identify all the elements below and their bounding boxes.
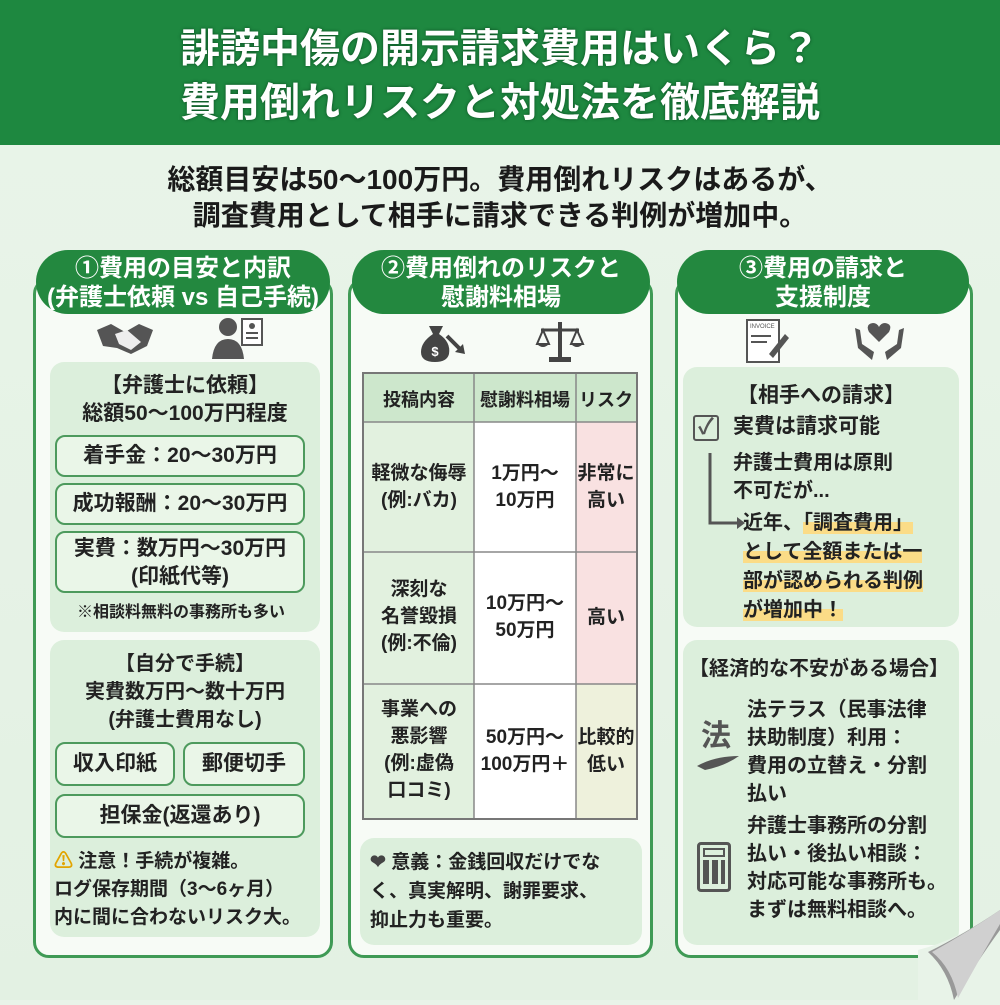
warning text: ⚠ 注意！手続が複雑。 — [54, 851, 249, 872]
table: damages: 高い — [587, 607, 625, 628]
row 3: 事業への — [381, 699, 457, 720]
heading: 【経済的な不安がある場合】 — [689, 658, 949, 680]
text: lawyer total: 【弁護士に依頼】 — [101, 374, 269, 397]
icon: checkbox: ✓ — [698, 414, 714, 439]
icon: money bag — [421, 326, 465, 362]
icon: heart in hands — [855, 323, 904, 360]
row 1 — [371, 462, 466, 511]
text: highlighted precedent: 部が認められる判例 — [743, 570, 923, 592]
row: retainer — [55, 435, 305, 477]
text: houterasu — [747, 698, 927, 805]
box: financial worries — [683, 640, 959, 945]
row: expenses — [55, 531, 305, 593]
box: significance — [360, 838, 642, 945]
row: revenue stamp: 収入印紙 — [73, 752, 157, 775]
heading: panel 3 — [677, 250, 969, 314]
text: self total: 実費数万円〜数十万円 — [85, 681, 285, 703]
text: highlighted precedent: として全額または一 — [743, 541, 922, 563]
box: significance: ❤ 意義：金銭回収だけでな — [370, 852, 600, 873]
heading: panel 2: ②費用倒れのリスクと — [381, 255, 621, 282]
row: expenses: (印紙代等) — [131, 565, 229, 588]
heading: panel 2: 慰謝料相場 — [441, 284, 561, 311]
icon: invoice: INVOICE — [750, 324, 775, 330]
row 3: 口コミ) — [387, 780, 451, 801]
text: lawyer fee: 弁護士費用は原則 — [733, 452, 893, 474]
warning text: 内に間に合わないリスク大。 — [54, 907, 301, 928]
table: damages: 10万円 — [495, 490, 555, 511]
page curl — [918, 910, 1000, 1000]
text: payment plans: まずは無料相談へ。 — [747, 899, 927, 921]
table: damages: 非常に — [577, 463, 634, 484]
title: 誹謗中傷の開示請求費用はいくら？ — [180, 27, 820, 71]
text: houterasu: 扶助制度）利用： — [747, 727, 907, 749]
icon: law hand: 法 — [701, 720, 731, 753]
box: significance: 抑止力も重要。 — [370, 910, 503, 931]
heading: panel 2 — [352, 250, 650, 314]
panel: claims and support — [675, 278, 973, 958]
text: lawyer fee: 不可だが... — [733, 480, 830, 502]
panel: risk and damages — [348, 278, 653, 958]
table: damages: 10万円〜 — [486, 593, 564, 614]
heading: 【相手への請求】 — [737, 384, 905, 407]
table: damages — [362, 372, 638, 820]
text: highlighted precedent: が増加中！ — [743, 599, 843, 621]
text: self total: 【自分で手続】 — [115, 653, 255, 675]
row: deposit: 担保金(返還あり) — [100, 804, 260, 827]
icon: calculator — [697, 842, 731, 892]
subtitle: 総額目安は50〜100万円。費用倒れリスクはあるが、 — [167, 164, 833, 195]
table: damages: 100万円＋ — [481, 754, 569, 775]
header band — [0, 0, 1000, 145]
text: payment plans: 弁護士事務所の分割 — [747, 815, 927, 837]
table header: 投稿内容 — [383, 390, 455, 410]
warning text — [54, 850, 301, 928]
box: lawyer request — [50, 362, 320, 632]
row: postage: 郵便切手 — [202, 752, 286, 775]
text: houterasu: 法テラス（民事法律 — [747, 699, 927, 721]
text: payment plans — [747, 814, 947, 921]
text: houterasu: 払い — [747, 783, 787, 805]
box: self procedure — [50, 640, 320, 937]
text: lawyer fee — [733, 452, 893, 502]
table: damages: 50万円〜 — [486, 727, 564, 748]
icon: money bag: $ — [431, 344, 439, 359]
heading: panel 1 — [36, 250, 330, 314]
heading: panel 3: ③費用の請求と — [739, 255, 907, 282]
text: payment plans: 払い・後払い相談： — [747, 843, 927, 865]
row 2: (例:不倫) — [381, 633, 457, 654]
text: highlighted precedent — [743, 512, 923, 621]
icon: scales — [536, 322, 584, 362]
table: damages: 1万円〜 — [491, 463, 559, 484]
text: highlighted precedent: 近年、「調査費用」 — [743, 512, 913, 534]
table: damages: 低い — [587, 754, 625, 775]
icon: person with document — [212, 318, 263, 359]
text: self total — [85, 652, 285, 731]
text: houterasu: 費用の立替え・分割 — [747, 755, 927, 777]
row 1: (例:バカ) — [381, 490, 457, 511]
row: retainer: 着手金：20〜30万円 — [83, 444, 277, 467]
table: damages: 高い — [587, 490, 625, 511]
table: damages: 50万円 — [495, 620, 555, 641]
row: success fee — [55, 483, 305, 525]
row 1: 軽微な侮辱 — [371, 463, 466, 484]
text: lawyer total — [82, 374, 288, 425]
row 3: 悪影響 — [390, 726, 448, 747]
table: damages: 比較的 — [577, 727, 634, 748]
row: success fee: 成功報酬：20〜30万円 — [73, 492, 287, 515]
icon: checkbox — [693, 415, 719, 441]
panel: cost breakdown — [33, 278, 333, 958]
title — [180, 26, 821, 125]
subtitle: 調査費用として相手に請求できる判例が増加中。 — [193, 200, 807, 231]
subtitle — [167, 164, 833, 231]
icon: law hand — [697, 720, 739, 770]
warning text: ログ保存期間（3〜6ヶ月） — [54, 879, 284, 900]
heading: panel 3: 支援制度 — [775, 284, 871, 311]
icon: invoice — [746, 319, 789, 363]
heading: panel 1: (弁護士依頼 vs 自己手続) — [47, 284, 319, 311]
row 2 — [381, 578, 457, 654]
text: expenses claimable: 実費は請求可能 — [733, 415, 880, 438]
row 2: 名誉毀損 — [381, 606, 457, 627]
table: damages: 慰謝料相場 — [480, 390, 570, 410]
row: deposit — [55, 794, 305, 838]
table: damages: リスク — [579, 390, 633, 410]
row 3: (例:虚偽 — [384, 753, 454, 774]
text: payment plans: 対応可能な事務所も。 — [747, 871, 947, 893]
title: 費用倒れリスクと対処法を徹底解説 — [180, 81, 820, 125]
box: claim against offender — [683, 367, 959, 627]
text: lawyer total: 総額50〜100万円程度 — [82, 402, 288, 425]
text: self total: (弁護士費用なし) — [108, 709, 262, 731]
note: ※相談料無料の事務所も多い — [77, 604, 285, 621]
row: postage — [183, 742, 305, 786]
box: significance: く、真実解明、謝罪要求、 — [370, 881, 598, 902]
row: expenses: 実費：数万円〜30万円 — [74, 537, 286, 560]
heading: panel 1: ①費用の目安と内訳 — [75, 255, 291, 282]
row 2: 深刻な — [390, 579, 448, 600]
row: revenue stamp — [55, 742, 175, 786]
arrow: bent — [708, 453, 745, 529]
icon: handshake — [97, 324, 153, 354]
row 3 — [381, 698, 457, 801]
